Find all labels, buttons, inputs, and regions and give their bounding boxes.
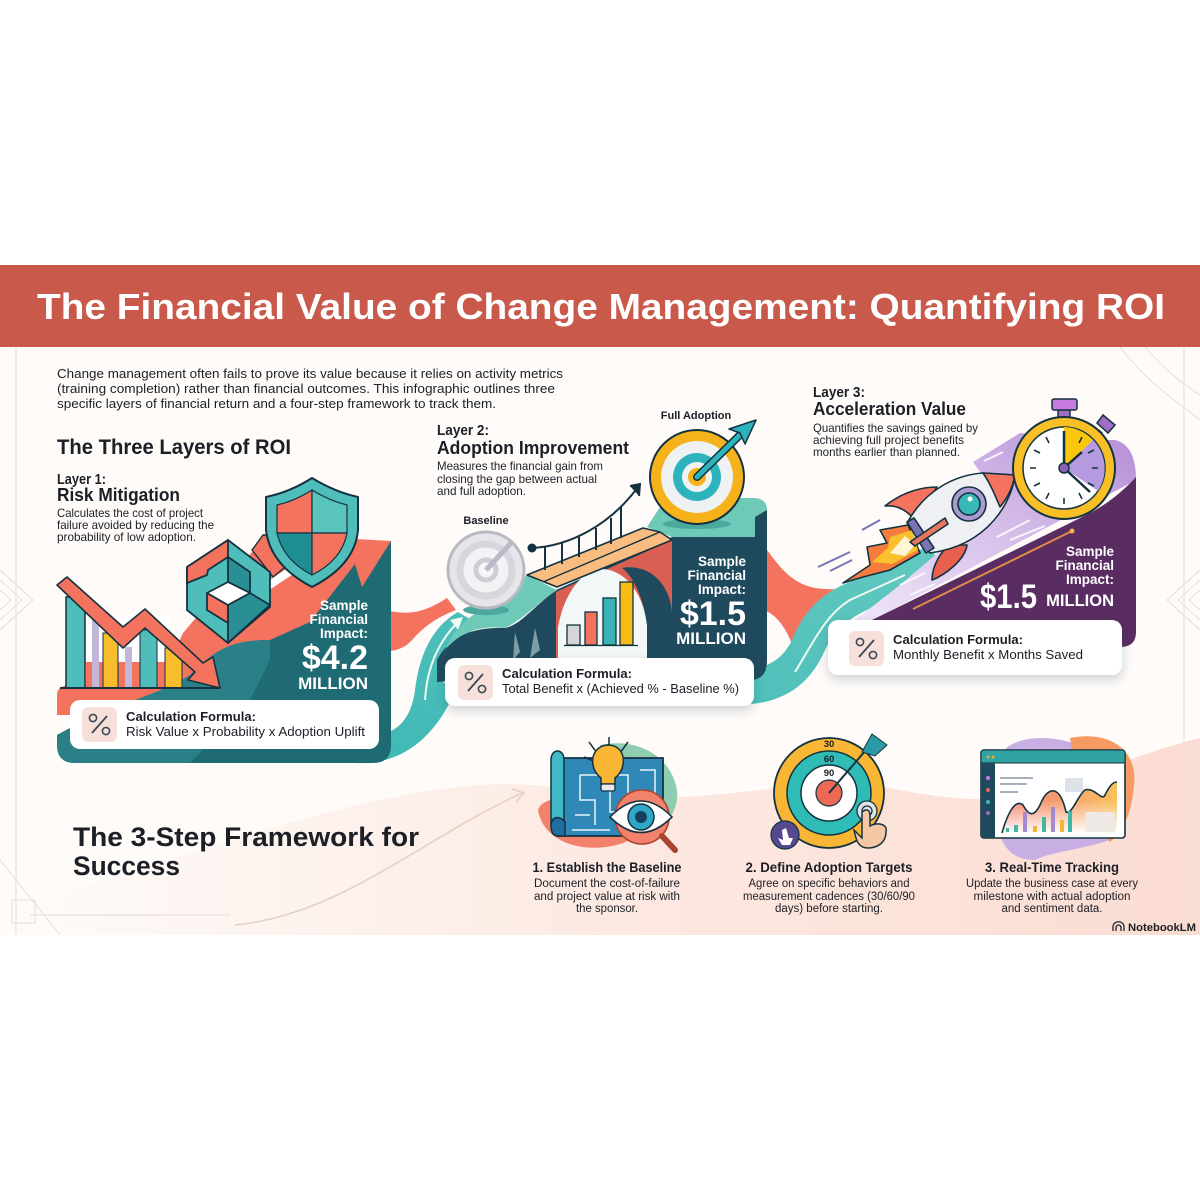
- intro paragraph: (training completion) rather than financial outcomes. This infographic outlines three: [57, 381, 555, 396]
- layer 2 heading: Layer 2:: [437, 422, 489, 439]
- layer 3 financial impact: MILLION: [1046, 592, 1114, 610]
- icon: percent: [849, 631, 884, 666]
- icon: percent: [458, 665, 493, 700]
- layer 3 heading: [813, 384, 966, 419]
- heading: three layers: The Three Layers of ROI: [57, 436, 291, 459]
- layer 2 description: Measures the financial gain from: [437, 459, 603, 473]
- bottom pink wave: [0, 738, 1200, 935]
- layer 1 financial impact: Financial: [309, 612, 368, 627]
- icon: 30/60/90 target: 30: [824, 739, 834, 750]
- layer 1 description: [57, 506, 214, 544]
- layer 2 heading: Adoption Improvement: [437, 438, 629, 458]
- heading: framework: [73, 822, 420, 881]
- icon: rocket: [843, 473, 1015, 583]
- bridge: [527, 484, 672, 587]
- motion marks: [818, 520, 880, 571]
- purple panel: [872, 477, 1136, 647]
- panel: layer 2 adoption improvement: [437, 410, 767, 706]
- bridge railing arrow: [528, 484, 640, 570]
- layer 2 heading: [437, 422, 629, 458]
- step 3 text: and sentiment data.: [1002, 903, 1102, 915]
- layer 2 description: closing the gap between actual: [437, 472, 597, 486]
- step 1 text: the sponsor.: [576, 903, 638, 915]
- step 1 text: 1. Establish the Baseline: [532, 859, 682, 875]
- speed lines: [900, 452, 1045, 595]
- layer 1 description: probability of low adoption.: [57, 530, 196, 544]
- navy rock: [437, 510, 767, 682]
- icon: baseline target: [448, 532, 524, 615]
- icon: purple tap badge: [771, 821, 799, 849]
- layer 3 heading: Layer 3:: [813, 384, 865, 401]
- layer 1 teal background: [57, 541, 391, 763]
- layer 2 formula card: [445, 658, 754, 706]
- icon: link arrow between hexagon and shield: [252, 535, 290, 577]
- icon: 30/60/90 target: 90: [824, 768, 834, 779]
- layer 1 heading: Layer 1:: [57, 471, 106, 488]
- page background: [0, 347, 1200, 935]
- mint left ledge: [442, 575, 557, 660]
- layer 1 financial impact: Impact:: [320, 626, 368, 641]
- layer 1 coral arrow background: [57, 535, 391, 715]
- layer 2 formula card: Total Benefit x (Achieved % - Baseline %): [502, 682, 739, 696]
- layer 3 financial impact: [980, 544, 1114, 616]
- step 1 text: [532, 859, 682, 915]
- intro paragraph: specific layers of financial return and a four-step framework to track them.: [57, 396, 496, 411]
- layer 1 formula card: Risk Value x Probability x Adoption Uplift: [126, 725, 366, 739]
- orange trajectory line: [913, 531, 1072, 609]
- icon: hexagon cycle: [187, 540, 270, 643]
- layer 1 description: Calculates the cost of project: [57, 506, 204, 520]
- step 3 text: [966, 859, 1138, 915]
- layer 2 description: and full adoption.: [437, 484, 526, 498]
- coral arrow highlight: [262, 570, 292, 590]
- layer 1 formula card: Calculation Formula:: [126, 710, 256, 724]
- layer 2 financial impact: Financial: [687, 568, 746, 583]
- layer 2 financial impact: [676, 554, 746, 648]
- layer 3 description: achieving full project benefits: [813, 433, 964, 447]
- white arrow on path: [425, 575, 905, 700]
- layer 3 formula card: [828, 620, 1122, 675]
- heading: framework: Success: [73, 851, 180, 881]
- bar chart: rising bars: [564, 582, 638, 646]
- step 2 text: days) before starting.: [775, 903, 883, 915]
- mint right platform: [647, 498, 767, 537]
- intro paragraph: Change management often fails to prove its value because it relies on activity metrics: [57, 366, 564, 381]
- icon: blueprint with bulb and eye: [538, 737, 677, 850]
- layer 3 financial impact: $1.5: [980, 578, 1037, 616]
- layer 2 formula card: Calculation Formula:: [502, 667, 632, 681]
- layer 3 description: Quantifies the savings gained by: [813, 421, 978, 435]
- step 2 text: measurement cadences (30/60/90: [743, 891, 915, 903]
- teal flowing path: [355, 545, 945, 763]
- curved pointer arrow: [235, 789, 524, 925]
- layer 3 description: [813, 421, 978, 459]
- step 1 text: and project value at risk with: [534, 891, 680, 903]
- step 1 establish the baseline: [532, 737, 682, 915]
- title: The Financial Value of Change Management: Quantifying ROI: [37, 286, 1165, 327]
- navy arch shadow: [622, 567, 678, 662]
- watermark: NotebookLM: [1128, 922, 1196, 934]
- icon: pointing hand: [854, 801, 886, 848]
- white opening: [558, 569, 647, 660]
- icon: falling arrow: [57, 577, 220, 688]
- baseline label: Baseline: [463, 515, 509, 527]
- lavender streak: [855, 433, 1136, 620]
- layer 1 financial impact: MILLION: [298, 674, 368, 693]
- step 1 text: Document the cost-of-failure: [534, 878, 680, 890]
- panel: layer 3 acceleration value: [813, 384, 1136, 675]
- layer 1 financial impact: [298, 598, 368, 693]
- layer 2 financial impact: Sample: [698, 554, 746, 569]
- heading: framework: The 3-Step Framework for: [73, 822, 420, 852]
- layer 3 financial impact: Impact:: [1066, 572, 1114, 587]
- layer 3 description: months earlier than planned.: [813, 445, 960, 459]
- cliff shapes: [437, 498, 767, 682]
- icon: 30/60/90 target: [771, 734, 887, 849]
- step 3 real-time tracking: [966, 736, 1138, 915]
- layer 2 financial impact: MILLION: [676, 629, 746, 648]
- layer 1 formula card: [70, 700, 379, 749]
- step 3 text: 3. Real-Time Tracking: [985, 859, 1119, 875]
- step 2 text: 2. Define Adoption Targets: [746, 859, 913, 875]
- layer 3 formula card: Calculation Formula:: [893, 633, 1023, 647]
- icon: full adoption target: [650, 420, 756, 529]
- flame: [843, 525, 920, 583]
- decorative side line art: [0, 347, 1200, 935]
- step 2 text: Agree on specific behaviors and: [748, 878, 910, 890]
- icon: 30/60/90 target: 60: [824, 754, 834, 765]
- icon: stopwatch: [1013, 399, 1115, 519]
- coral arch: [556, 540, 672, 660]
- intro paragraph: [57, 366, 564, 411]
- step 3 text: Update the business case at every: [966, 878, 1138, 890]
- layer 2 description: [437, 459, 603, 498]
- step 2 text: [743, 859, 915, 915]
- layer 2 financial impact: Impact:: [698, 582, 746, 597]
- title banner: [0, 265, 1200, 347]
- layer 3 heading: Acceleration Value: [813, 399, 966, 419]
- full adoption label: Full Adoption: [661, 410, 732, 422]
- layer 1 heading: [57, 471, 180, 505]
- layer 3 financial impact: Sample: [1066, 544, 1114, 559]
- layer 1 heading: Risk Mitigation: [57, 485, 180, 505]
- panel: layer 1 risk mitigation: [57, 471, 391, 763]
- icon: dashboard: [981, 736, 1134, 860]
- layer 3 formula card: Monthly Benefit x Months Saved: [893, 648, 1083, 662]
- layer 1 description: failure avoided by reducing the: [57, 518, 214, 532]
- rock streaks: [513, 628, 540, 660]
- step 3 text: milestone with actual adoption: [974, 891, 1130, 903]
- icon: percent: [82, 707, 117, 742]
- layer 2 financial impact: $1.5: [680, 595, 746, 633]
- layer 1 financial impact: Sample: [320, 598, 368, 613]
- layer 3 financial impact: Financial: [1055, 558, 1114, 573]
- bar chart: falling bars: [60, 597, 220, 688]
- icon: shield: [266, 478, 358, 587]
- step 2 define adoption targets: [743, 734, 915, 915]
- coral connector ribbons: [385, 543, 860, 652]
- layer 1 financial impact: $4.2: [302, 639, 368, 677]
